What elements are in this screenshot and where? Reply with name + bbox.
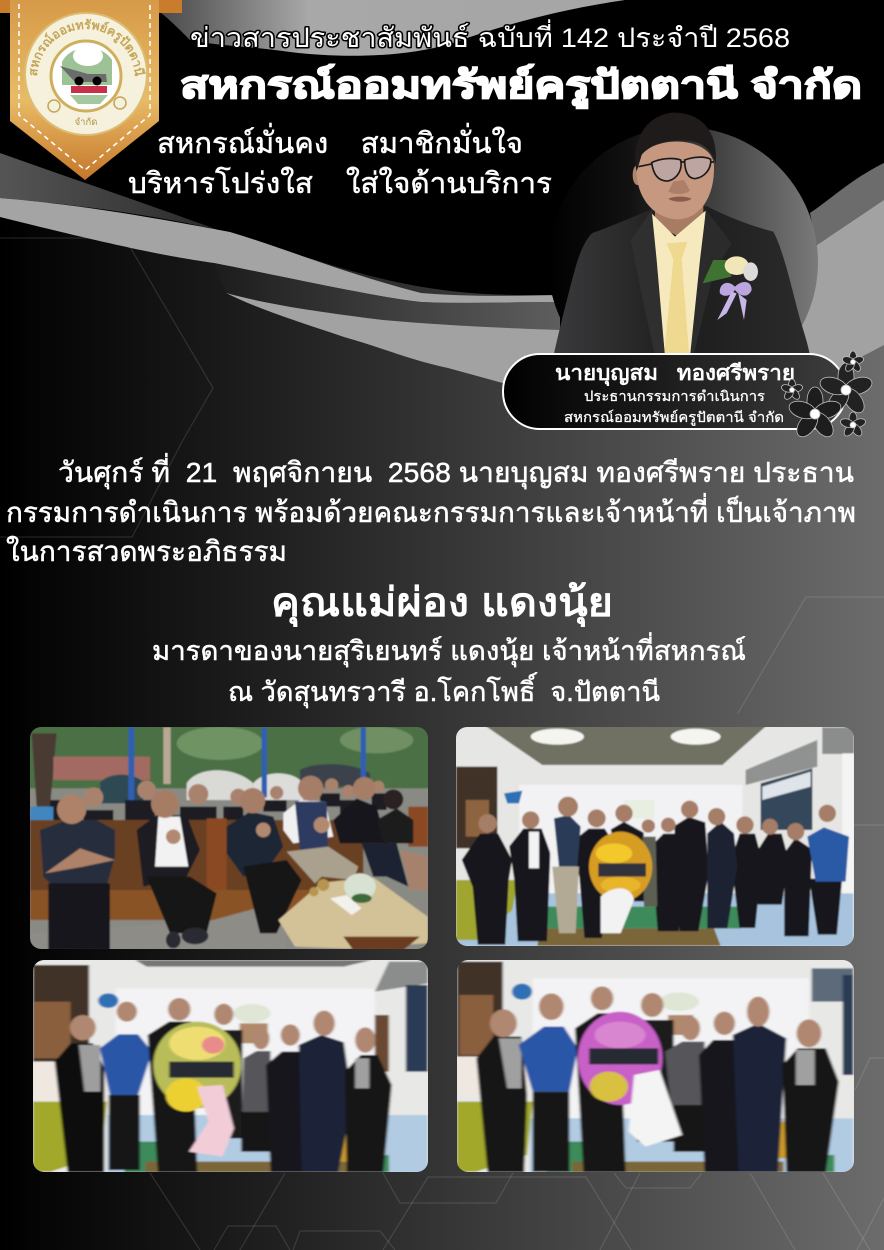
photo: group with magenta wreath <box>451 958 862 1175</box>
person 6 <box>377 808 413 843</box>
ribbon badge with logo <box>0 0 182 180</box>
ground <box>206 908 258 934</box>
floor <box>456 893 853 946</box>
logo <box>24 12 148 136</box>
wave: right grey band <box>810 163 884 245</box>
stitching <box>19 4 150 170</box>
flowers <box>344 873 376 900</box>
jacket <box>553 206 810 357</box>
wave: lower dark band <box>214 263 560 330</box>
announcement paragraph: กรรมการดำเนินการ พร้อมด้วยคณะกรรมการและเจ้าหน้าที่ เป็นเจ้าภาพ <box>6 493 856 528</box>
person 2 <box>137 815 200 887</box>
person 3 <box>227 812 283 877</box>
photo: group with yellow wreath <box>454 725 857 948</box>
newsletter line: ข่าวสารประชาสัมพันธ์ ฉบับที่ 142 ประจำปี 2568 <box>190 19 790 53</box>
deceased name: คุณแม่ผ่อง แดงนุ้ย <box>271 581 613 628</box>
logo emblem <box>60 46 112 104</box>
hair <box>635 113 716 172</box>
logo circular name: สหกรณ์ออมทรัพย์ครูปัตตานี <box>30 18 146 76</box>
head <box>637 141 714 219</box>
ribbon top strip <box>0 0 182 13</box>
header black panel with waves <box>0 0 884 385</box>
back row <box>50 793 387 823</box>
announcement paragraph: ในการสวดพระอภิธรรม <box>6 535 287 567</box>
chairman title: ประธานกรรมการดำเนินการ <box>584 388 765 404</box>
motto <box>128 123 552 200</box>
photo: group with pink ribbon wreath <box>28 958 434 1175</box>
person 1 <box>40 820 115 887</box>
neck <box>655 206 704 236</box>
corsage <box>703 256 758 320</box>
shirt <box>652 211 706 357</box>
bench <box>30 818 364 891</box>
relation and venue: มารดาของนายสุริเยนทร์ แดงนุ้ย เจ้าหน้าที่สหกรณ์ <box>152 632 746 668</box>
motto: สหกรณ์มั่นคง สมาชิกมั่นใจ <box>157 123 523 160</box>
photo: seated guests <box>27 725 433 952</box>
portrait of chairman <box>553 113 810 357</box>
chairman name: นายบุญสม ทองศรีพราย <box>555 361 795 387</box>
ribbon body <box>10 0 159 180</box>
mouth <box>668 197 692 202</box>
wreath <box>589 832 652 902</box>
wave: dark upper band <box>0 153 218 230</box>
relation and venue <box>152 632 746 709</box>
glasses <box>638 157 714 181</box>
people <box>476 1037 527 1172</box>
nose <box>668 180 690 194</box>
person 5 <box>333 798 387 843</box>
lapels <box>637 211 665 353</box>
announcement paragraph: วันศุกร์ ที่ 21 พฤศจิกายน 2568 นายบุญสม ทองศรีพราย ประธาน <box>58 453 854 490</box>
people <box>463 818 841 943</box>
people <box>55 1043 104 1172</box>
wave: light band <box>0 198 560 303</box>
announcement paragraph <box>6 453 856 567</box>
logo bottom label: จำกัด <box>75 117 97 128</box>
wave: top grey swoosh <box>160 0 625 56</box>
portrait backdrop circle <box>548 127 818 397</box>
relation and venue: ณ วัดสุนทรวารี อ.โคกโพธิ์ จ.ปัตตานี <box>228 672 660 709</box>
table <box>278 877 428 949</box>
plumeria flowers <box>780 351 874 441</box>
wreath <box>153 1022 241 1108</box>
wreath <box>578 1012 662 1105</box>
organisation name: สหกรณ์ออมทรัพย์ครูปัตตานี จำกัด <box>180 64 862 109</box>
wave: light wedge <box>226 200 884 385</box>
tie <box>664 242 689 357</box>
ears <box>632 166 638 185</box>
person 4 <box>283 800 333 843</box>
chairman organisation: สหกรณ์ออมทรัพย์ครูปัตตานี จำกัด <box>564 409 784 426</box>
name plate <box>503 354 846 429</box>
motto: บริหารโปร่งใส ใส่ใจด้านบริการ <box>128 166 552 200</box>
